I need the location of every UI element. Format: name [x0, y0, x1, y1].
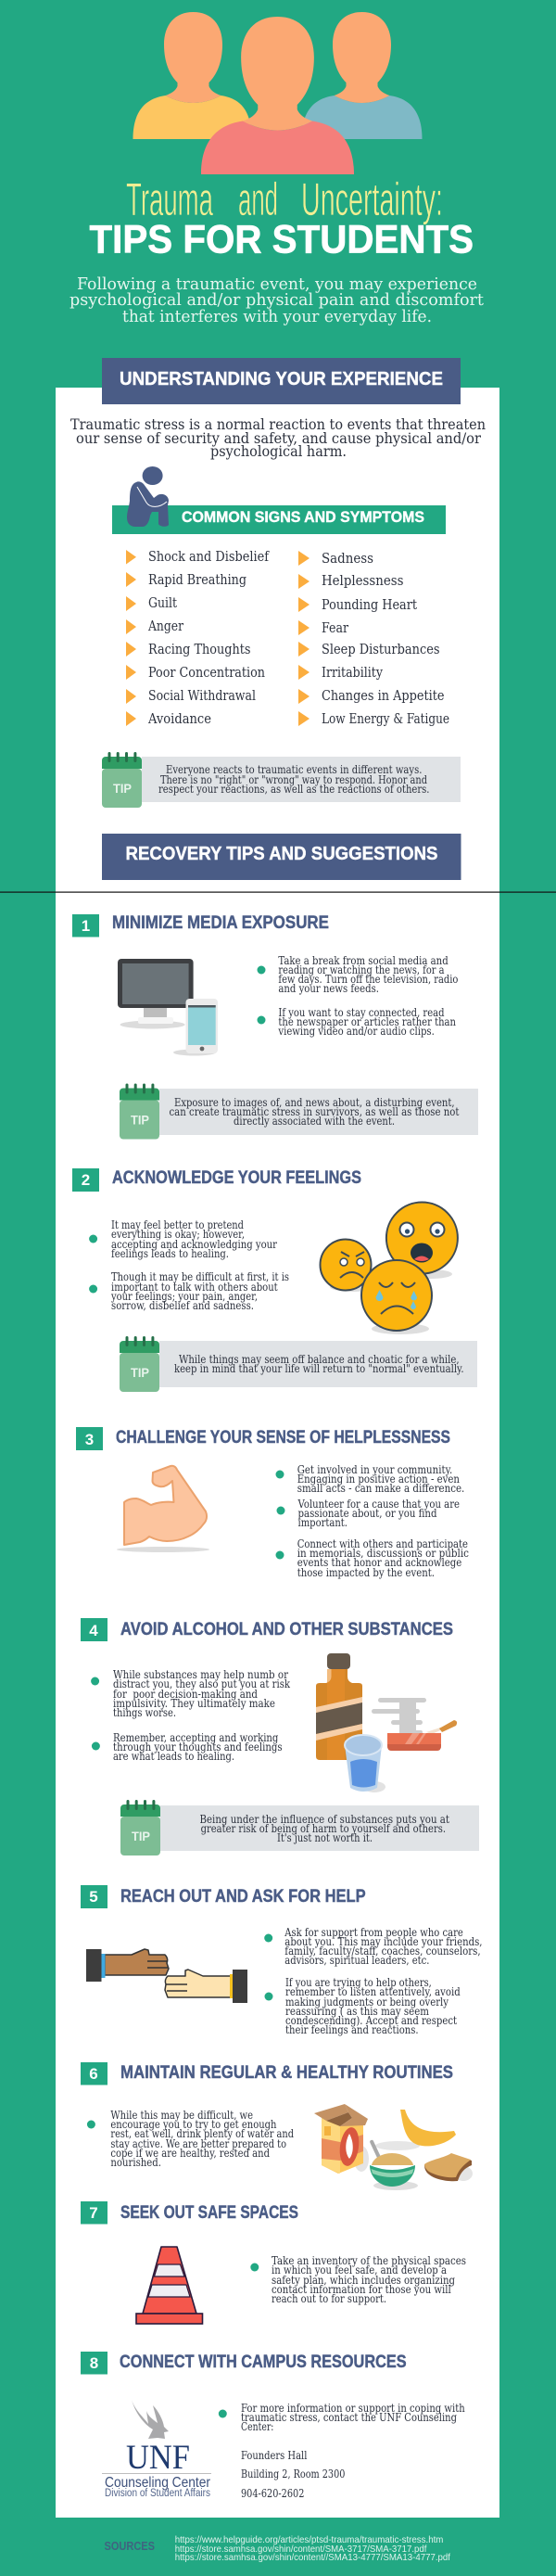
text: section 4: impulsivity. They ultimately make	[113, 1696, 275, 1710]
text: section 4: for poor decision-making and	[113, 1687, 258, 1701]
intro text	[70, 274, 485, 326]
sources: https://store.samhsa.gov/shin/content/SMA-3717/SMA-3717.pdf	[175, 2544, 426, 2555]
tip callout: off balance: While things may seem off balance and choatic for a while,	[179, 1352, 460, 1366]
section 3 heading: 3	[85, 1431, 94, 1448]
list: symptoms right: Pounding Heart	[322, 598, 417, 613]
title: and	[238, 173, 278, 225]
section 2 heading: ACKNOWLEDGE YOUR FEELINGS	[112, 1168, 361, 1188]
text: section 3: Get involved in your community.	[297, 1462, 452, 1476]
heading: recovery tips	[102, 834, 461, 880]
section 6 heading: MAINTAIN REGULAR & HEALTHY ROUTINES	[120, 2063, 453, 2083]
tip callout: substances: greater risk of being of harm to yourself and others.	[201, 1821, 446, 1835]
text: section 1: If you want to stay connected, read	[278, 1005, 445, 1019]
text: section 2: It may feel better to pretend	[111, 1218, 244, 1231]
text: section 6: nourished.	[110, 2155, 161, 2169]
section 7 heading: 7	[89, 2204, 98, 2222]
text: section 6: While this may be difficult, we	[110, 2108, 253, 2122]
text: section 3: passionate about, or you find	[298, 1506, 437, 1520]
text: section 1	[258, 953, 458, 1038]
section 5 heading: 5	[89, 1888, 98, 1906]
text: section 7: Take an inventory of the physical spaces	[272, 2253, 466, 2267]
list: symptoms left: Shock and Disbelief	[148, 550, 270, 565]
section 6 heading: 6	[89, 2065, 98, 2083]
text: section 8: For more information or support in coping with	[241, 2401, 465, 2415]
text: section 5: If you are trying to help others,	[285, 1975, 432, 1989]
section 1 heading	[72, 913, 329, 937]
list: symptoms left: Poor Concentration	[148, 666, 265, 681]
icon: safety cone	[136, 2247, 202, 2324]
text: section 2: feelings leads to healing.	[111, 1246, 229, 1260]
text: section 3: Engaging in positive action - even	[297, 1472, 460, 1486]
text: section 3: important.	[298, 1515, 348, 1529]
section 5 heading: REACH OUT AND ASK FOR HELP	[120, 1887, 366, 1906]
section 1 heading: MINIMIZE MEDIA EXPOSURE	[112, 913, 329, 933]
text: section 7	[250, 2253, 466, 2305]
text: section 4: While substances may help numb or	[113, 1667, 288, 1681]
section 7 heading	[81, 2201, 298, 2224]
text: section 3: Connect with others and participate	[297, 1537, 468, 1550]
text: section 5: Ask for support from people who care	[284, 1925, 463, 1939]
intro text: psychological and/or physical pain and discomfort	[70, 290, 485, 310]
text: section 5: about you. This may include your friends,	[284, 1934, 482, 1948]
heading: common signs and symptoms: COMMON SIGNS AND SYMPTOMS	[182, 509, 424, 526]
text: section 3	[276, 1462, 469, 1579]
list: symptoms right: Irritability	[322, 666, 384, 681]
text: section 5: their feelings and reactions.	[285, 2022, 419, 2036]
icon: breakfast foods	[314, 2104, 473, 2190]
text: section 2: accepting and acknowledging your	[111, 1237, 277, 1251]
panel: white content	[56, 388, 499, 2518]
text: section 8	[219, 2401, 465, 2500]
section 2 heading: 2	[82, 1171, 90, 1189]
list: symptoms right: Helplessness	[322, 574, 404, 589]
sources: https://store.samhsa.gov/shin/content//SMA13-4777/SMA13-4777.pdf	[175, 2552, 450, 2563]
logo: UNF Counseling Center	[102, 2400, 211, 2499]
tip callout: media exposure: directly associated with the event.	[234, 1114, 395, 1128]
list: symptoms left	[126, 550, 270, 727]
list: symptoms right: Changes in Appetite	[322, 689, 445, 704]
section 8 heading: CONNECT WITH CAMPUS RESOURCES	[120, 2353, 407, 2372]
text: section 5: remember to listen attentively, avoid	[285, 1984, 461, 1998]
text: traumatic stress definition: our sense of security and safety, and cause physical and/or	[76, 430, 482, 447]
text: section 1: reading or watching the news, for a	[278, 963, 445, 976]
text: section 8: Founders Hall	[241, 2448, 307, 2462]
sources: SOURCES	[104, 2539, 155, 2553]
text: section 2: important to talk with others about	[111, 1280, 278, 1294]
text: section 8: traumatic stress, contact the UNF Counseling	[241, 2410, 457, 2424]
text: section 3: Volunteer for a cause that you are	[297, 1497, 460, 1511]
text: section 2: Though it may be difficult at first, it is	[111, 1269, 289, 1283]
icon: monitor and phone	[118, 959, 218, 1055]
text: section 3: in memorials, discussions or public	[297, 1546, 469, 1560]
tip callout: media exposure: can create traumatic stress in survivors, as well as those not	[169, 1104, 460, 1118]
list: symptoms left: Avoidance	[147, 712, 211, 727]
title: TIPS FOR STUDENTS	[89, 217, 474, 261]
section 4 heading: AVOID ALCOHOL AND OTHER SUBSTANCES	[120, 1620, 453, 1639]
text: section 6: rest, eat well, drink plenty of water and	[110, 2126, 294, 2140]
text: section 8: Center:	[241, 2419, 273, 2433]
list: symptoms left: Racing Thoughts	[148, 643, 250, 657]
text: section 8: 904-620-2602	[241, 2486, 304, 2500]
list: symptoms right: Fear	[322, 621, 348, 636]
text: section 4: through your thoughts and feelings	[113, 1740, 283, 1753]
section 8 heading	[81, 2352, 407, 2374]
heading: understanding your experience: UNDERSTANDING YOUR EXPERIENCE	[120, 369, 443, 389]
list: symptoms left: Social Withdrawal	[148, 689, 256, 704]
text: section 6: cope if we are healthy, rested and	[110, 2146, 270, 2160]
tip callout: everyone reacts: Everyone reacts to traumatic events in different ways.	[166, 762, 422, 776]
text: traumatic stress definition: Traumatic stress is a normal reaction to events that threaten	[70, 416, 486, 433]
text: section 2: sorrow, disbelief and sadness.	[111, 1298, 254, 1312]
icon: three people	[133, 12, 423, 174]
text: section 5: family, faculty/staff, coaches, counselors,	[284, 1944, 481, 1958]
heading: common signs and symptoms	[112, 505, 446, 534]
tip callout: off balance	[120, 1336, 477, 1392]
text: section 3: events that honor and acknowlege	[297, 1555, 461, 1569]
section 7 heading: SEEK OUT SAFE SPACES	[120, 2203, 298, 2223]
sources: https://www.helpguide.org/articles/ptsd-trauma/traumatic-stress.htm	[175, 2534, 444, 2545]
icon: sitting person	[127, 466, 169, 527]
logo: UNF Counseling Center: Counseling Center	[105, 2475, 211, 2491]
list: symptoms left: Guilt	[148, 596, 177, 611]
text: section 1: the newspaper or articles rather than	[278, 1014, 456, 1028]
title: Uncertainty:	[301, 173, 443, 225]
icon: bottle, glass and ashtray	[316, 1653, 457, 1792]
text: section 7: safety plan, which includes organizing	[272, 2273, 455, 2287]
text: section 6: encourage you to try to get enough	[110, 2117, 277, 2131]
tip callout: substances: It's just not worth it.	[277, 1830, 373, 1844]
text: section 7: reach out to for support.	[272, 2291, 386, 2305]
text: section 4: are what leads to healing.	[113, 1749, 234, 1763]
tip callout: substances: Being under the influence of substances puts you at	[200, 1812, 449, 1826]
section 3 heading: CHALLENGE YOUR SENSE OF HELPLESSNESS	[116, 1428, 450, 1447]
text: section 6: stay active. We are better prepared to	[110, 2136, 286, 2150]
icon: reaching hands	[86, 1949, 247, 2003]
section 3 heading	[76, 1427, 450, 1450]
text: section 3: small acts - can make a difference.	[297, 1481, 464, 1495]
heading: understanding your experience	[102, 358, 461, 404]
tip callout: media exposure: Exposure to images of, and news about, a disturbing event,	[174, 1095, 455, 1109]
text: section 4: Remember, accepting and working	[113, 1730, 278, 1744]
text: section 1: Take a break from social media and	[278, 953, 449, 967]
sources	[104, 2534, 450, 2563]
text: section 4: distract you, they also put you at risk	[113, 1677, 290, 1690]
tip callout: off balance: keep in mind that your life will return to "normal" eventually.	[174, 1361, 464, 1375]
section 6 heading	[81, 2062, 453, 2085]
tip callout: media exposure	[120, 1083, 478, 1139]
text: section 5: advisors, spiritual leaders, etc.	[284, 1953, 429, 1967]
title	[89, 173, 474, 261]
list: symptoms right: Low Energy & Fatigue	[322, 712, 449, 727]
intro text: Following a traumatic event, you may experience	[77, 274, 477, 294]
text: section 3: those impacted by the event.	[297, 1565, 435, 1579]
section 1 heading: 1	[82, 917, 90, 935]
list: symptoms right	[298, 551, 449, 727]
tip callout: everyone reacts: respect your reactions, as well as the reactions of others.	[158, 782, 430, 796]
tip callout: everyone reacts: There is no "right" or "wrong" way to respond. Honor and	[160, 772, 427, 786]
text: section 6	[87, 2108, 294, 2169]
text: section 7: in which you feel safe, and develop a	[272, 2263, 447, 2276]
section 2 heading	[72, 1168, 361, 1192]
section 4 heading: 4	[89, 1622, 98, 1639]
text: section 5: making judgments or being overly	[285, 1995, 449, 2009]
text: section 1: and your news feeds.	[278, 981, 379, 995]
text: section 1: few days. Turn off the television, radio	[278, 972, 458, 986]
section 5 heading	[81, 1885, 366, 1908]
text: section 2: your feelings; your pain, anger,	[110, 1289, 258, 1303]
text: section 4: things worse.	[113, 1705, 176, 1719]
text: section 5: reassuring ( as this may seem	[285, 2004, 429, 2018]
section 4 heading	[81, 1618, 453, 1641]
section 8 heading: 8	[90, 2354, 98, 2372]
text: section 4	[91, 1667, 290, 1763]
text: traumatic stress definition	[70, 416, 486, 460]
text: section 8: Building 2, Room 2300	[241, 2467, 345, 2480]
icon: emotion faces	[321, 1202, 458, 1334]
text: section 2	[89, 1218, 289, 1312]
tip callout: substances	[120, 1800, 479, 1855]
text: section 5: condescending). Accept and respect	[285, 2013, 457, 2027]
heading: recovery tips: RECOVERY TIPS AND SUGGESTIONS	[126, 844, 437, 864]
text: traumatic stress definition: psychological harm.	[210, 443, 347, 460]
list: symptoms right: Sadness	[322, 552, 373, 567]
logo: UNF Counseling Center: Division of Student Affairs	[105, 2488, 210, 2499]
icon: flexed arm	[117, 1466, 209, 1552]
title: Trauma	[126, 173, 213, 225]
intro text: that interferes with your everyday life.	[122, 307, 432, 326]
text: section 2: everything is okay; however,	[111, 1227, 245, 1241]
list: symptoms left: Rapid Breathing	[148, 573, 246, 588]
logo: UNF Counseling Center: UNF	[126, 2439, 190, 2477]
list: symptoms left: Anger	[147, 619, 183, 634]
list: symptoms right: Sleep Disturbances	[322, 643, 439, 657]
text: section 1: viewing video and/or audio clips.	[278, 1024, 435, 1038]
tip callout: everyone reacts	[102, 752, 461, 808]
text: section 5	[264, 1925, 482, 2036]
text: section 7: contact information for those you will	[272, 2282, 451, 2296]
